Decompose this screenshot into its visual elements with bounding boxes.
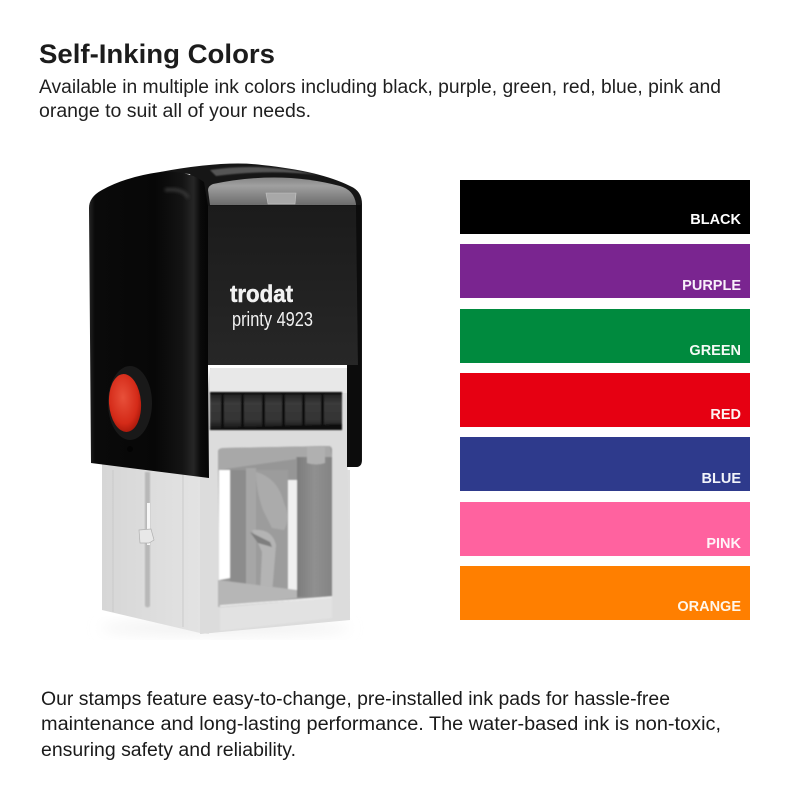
footer text: ensuring safety and reliability.: [41, 740, 296, 761]
swatch: green: GREEN: [689, 343, 741, 359]
back dome: [160, 164, 362, 467]
swatch: blue: BLUE: [702, 471, 741, 487]
swatch: purple: PURPLE: [682, 278, 741, 294]
grey base front face: [200, 368, 350, 634]
intro text: Available in multiple ink colors including black, purple, green, red, blue, pink and: [39, 77, 721, 98]
swatch: black: BLACK: [690, 212, 742, 228]
swatch: orange: [460, 566, 750, 620]
swatch: pink: PINK: [706, 536, 742, 552]
ink pad opening: [218, 446, 332, 631]
title: Self-Inking Colors: [39, 39, 275, 69]
swatch: orange: ORANGE: [677, 599, 741, 615]
grey base left face: [102, 460, 209, 634]
footer text: maintenance and long-lasting performance. The water-based ink is non-toxic,: [41, 714, 721, 735]
footer text: Our stamps feature easy-to-change, pre-installed ink pads for hassle-free: [41, 689, 670, 710]
brand text: [230, 281, 313, 331]
brand text: trodat: [230, 281, 293, 308]
stamp illustration: [89, 164, 362, 634]
roller band: [210, 392, 342, 430]
swatch: blue: [460, 437, 750, 491]
swatch: green: [460, 309, 750, 363]
swatch: purple: [460, 244, 750, 298]
red button: [107, 366, 152, 452]
front panel: [208, 206, 358, 365]
swatch: black: [460, 180, 750, 234]
intro text: [39, 77, 721, 122]
swatch: red: RED: [710, 407, 741, 423]
footer text: [41, 689, 721, 761]
black stamp body: [89, 164, 362, 478]
color swatches: [460, 180, 750, 620]
swatch: red: [460, 373, 750, 427]
brand text: printy 4923: [232, 309, 313, 331]
swatch: pink: [460, 502, 750, 556]
side panel: [89, 172, 209, 478]
clear top window: [208, 177, 356, 205]
intro text: orange to suit all of your needs.: [39, 101, 311, 122]
